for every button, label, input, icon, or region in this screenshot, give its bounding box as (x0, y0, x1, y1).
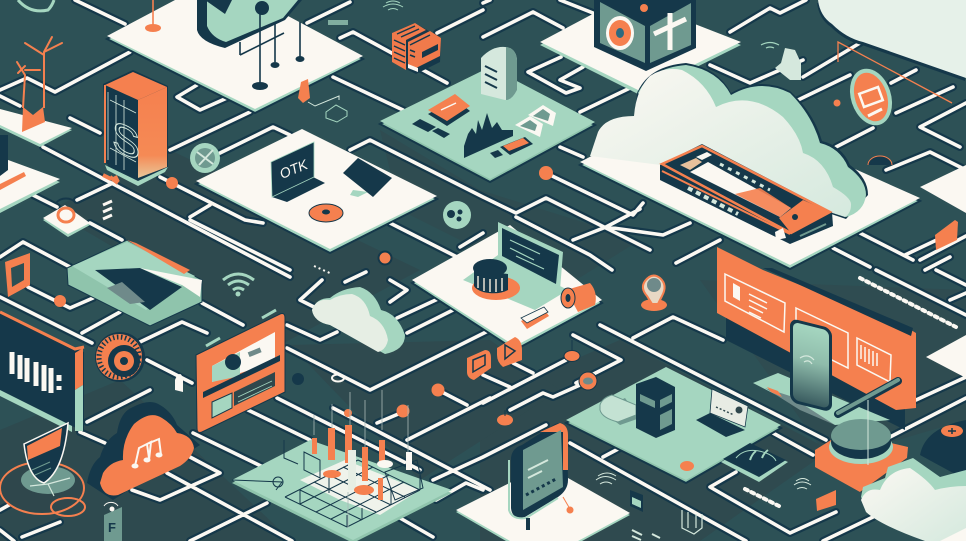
chair on ring (0, 423, 85, 516)
small dotted marks (314, 266, 332, 274)
platform: small left white (0, 109, 72, 147)
server tombstone (481, 47, 517, 100)
white F tag (104, 502, 122, 541)
big top-right cloud corner (817, 0, 966, 81)
big cloud (590, 63, 868, 219)
cube icon (594, 0, 696, 71)
white dots row (745, 489, 781, 507)
laptop with OTK screen (271, 142, 325, 202)
orange pill (500, 137, 533, 155)
orange music cloud (87, 402, 200, 500)
tablet (509, 423, 574, 530)
orange bent tag (935, 220, 958, 250)
stylus bar (838, 381, 898, 414)
three small cards (515, 105, 556, 137)
platform: mint grid (232, 390, 452, 541)
white small pin (175, 374, 183, 392)
bulb pin (641, 276, 667, 311)
small orange nodes (497, 340, 597, 426)
platform: white under cube (540, 0, 741, 95)
dark arc marker (868, 156, 892, 165)
orange disc (309, 204, 343, 222)
laptop (696, 389, 748, 437)
mint pad (600, 395, 640, 425)
top-left partial ring (18, 0, 54, 11)
wifi mint icon (223, 274, 254, 296)
dark ring connector (292, 373, 344, 385)
bottom-right cloud (861, 458, 966, 541)
platform: top white (107, 0, 363, 113)
large orange screen (717, 247, 916, 430)
small card (521, 307, 549, 329)
orange triangle line (838, 42, 952, 103)
small white label top (328, 20, 348, 25)
monitor (343, 158, 392, 197)
orange flag (816, 490, 836, 511)
top cloud with poles (197, 0, 304, 90)
orange server top (392, 23, 441, 74)
orange card (428, 94, 470, 126)
platform: lower mint (566, 367, 781, 483)
drum (472, 259, 520, 300)
platform: bottom white (456, 465, 630, 541)
orange roll (561, 283, 596, 312)
orange tablet device (196, 310, 285, 432)
orange node dots (54, 166, 553, 418)
platform: top centre mint (380, 47, 595, 182)
small square chip (630, 490, 643, 512)
platform: OTK white (196, 129, 437, 253)
orange tower: S (112, 111, 140, 171)
small mint cloud (312, 287, 405, 354)
mint base (463, 255, 568, 310)
white menu bars (103, 201, 112, 219)
orange tower (103, 70, 168, 186)
white dotted line (860, 278, 956, 327)
play hexagon icons (467, 337, 522, 380)
wifi mini arcs (383, 1, 779, 48)
left orange square (5, 253, 30, 297)
spiky chart (464, 113, 513, 158)
dark round corner with badge (920, 420, 966, 480)
dark pad with arcs (721, 443, 788, 482)
screen (498, 222, 563, 290)
small mint cloud top (775, 48, 801, 80)
platform: small right white (926, 335, 966, 378)
mint pad under phone (753, 373, 890, 425)
orange dot small (834, 100, 840, 106)
orange feet (103, 175, 118, 183)
orange gear (95, 332, 145, 382)
small dark items (412, 119, 450, 138)
platform: right edge white (920, 165, 966, 213)
orange dot (680, 461, 694, 471)
device on cloud platform (660, 144, 833, 244)
platform: small ring pad (43, 199, 90, 237)
small outlined bottom glyphs (632, 510, 702, 540)
small orange tag and link (298, 79, 347, 122)
platform: lower left white (0, 135, 60, 213)
platform: small white bottom right (940, 528, 966, 541)
orange pole (145, 0, 161, 32)
left dark monitor (0, 312, 84, 432)
laptop with OTK screen: OTK (277, 156, 310, 182)
platform: big cloud base (580, 100, 920, 269)
mint circular badges (190, 143, 471, 229)
tree icon (17, 37, 62, 132)
wifi lower (596, 473, 811, 489)
orange oval video badge (843, 63, 899, 131)
dark server box (636, 377, 675, 438)
platform: centre white (412, 222, 602, 350)
orange button base (815, 400, 908, 495)
mint device box (67, 240, 202, 326)
white F tag: F (108, 520, 116, 535)
phone (790, 318, 832, 412)
